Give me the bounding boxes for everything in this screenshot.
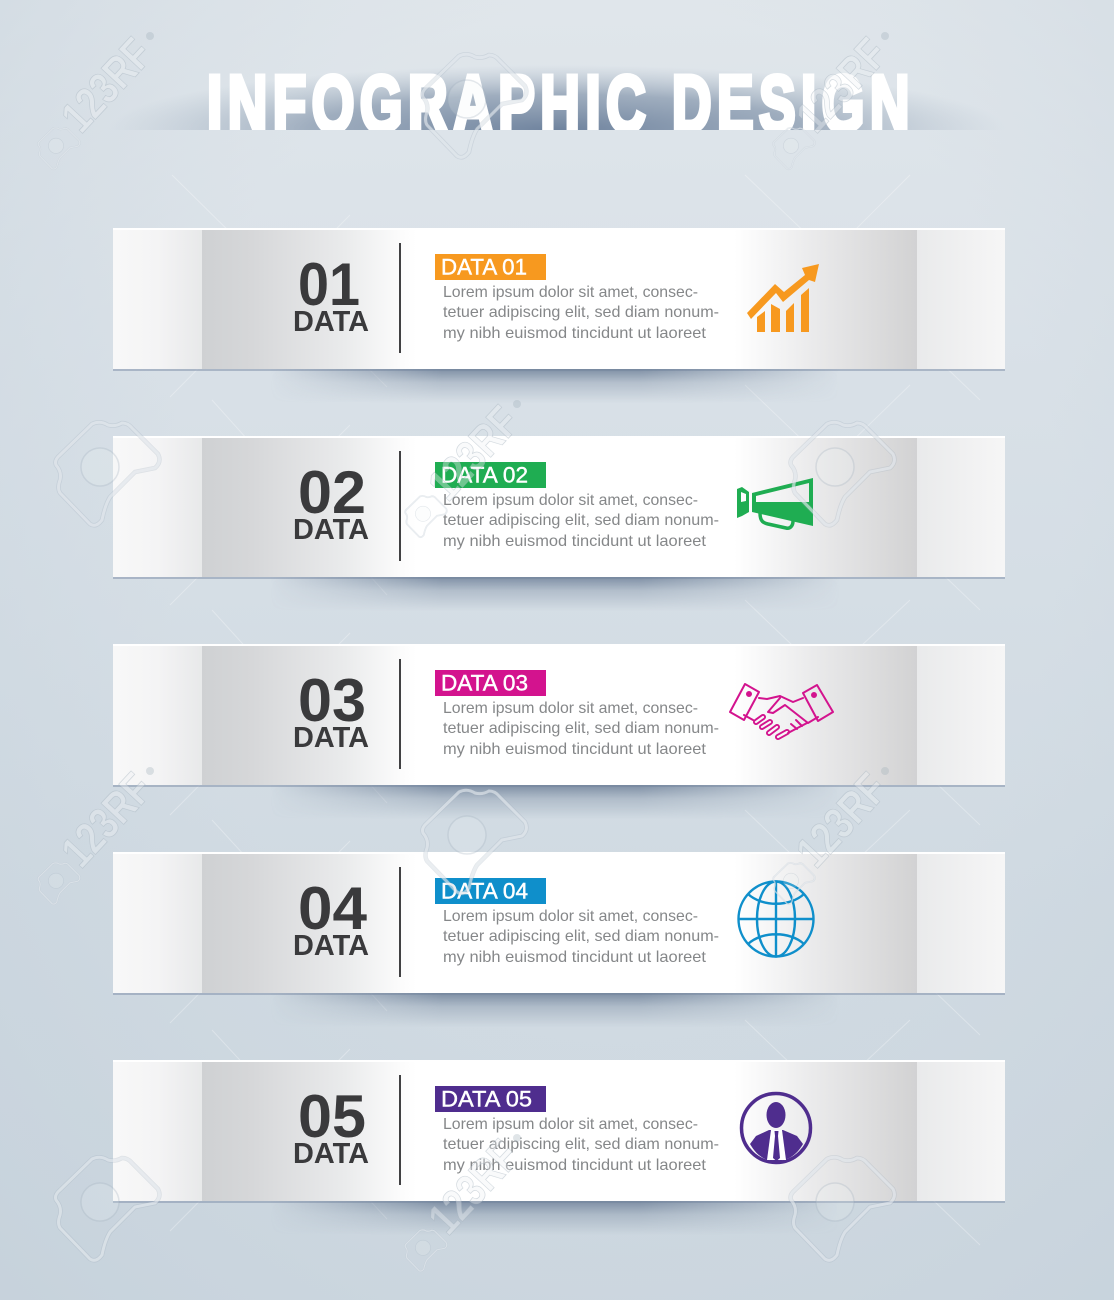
panel: row 3 — [113, 644, 1005, 819]
number 02: 02 — [298, 459, 366, 526]
panel: row 1 — [113, 228, 1005, 403]
number 01: 01 — [298, 251, 360, 318]
body text: tetuer adipiscing elit, sed diam nonum- — [443, 512, 719, 529]
title shadow — [148, 70, 968, 130]
watermarks: 123RF — [786, 28, 897, 142]
body text: Lorem ipsum dolor sit amet, consec- — [443, 908, 698, 925]
data caption: DATA — [293, 514, 369, 546]
body text: tetuer adipiscing elit, sed diam nonum- — [443, 304, 719, 321]
data caption: DATA — [293, 1138, 369, 1170]
body text: my nibh euismod tincidunt ut laoreet — [443, 741, 707, 758]
label: DATA 03: DATA 03 — [441, 670, 528, 696]
icon: megaphone — [737, 478, 813, 528]
body text: Lorem ipsum dolor sit amet, consec- — [443, 492, 698, 509]
body text — [443, 284, 719, 342]
watermarks: 123RF — [51, 28, 162, 142]
body text: tetuer adipiscing elit, sed diam nonum- — [443, 928, 719, 945]
watermarks: 123RF — [51, 763, 162, 877]
body text — [443, 492, 719, 550]
body text: Lorem ipsum dolor sit amet, consec- — [443, 700, 698, 717]
body text — [443, 908, 719, 966]
body text: my nibh euismod tincidunt ut laoreet — [443, 325, 707, 342]
watermarks: 123RF — [418, 396, 529, 510]
watermarks — [38, 28, 897, 1271]
panel: row 5 — [113, 1060, 1005, 1235]
body text: Lorem ipsum dolor sit amet, consec- — [443, 1116, 698, 1133]
number 05: 05 — [298, 1083, 366, 1150]
body text — [443, 700, 719, 758]
label: DATA 04: DATA 04 — [441, 878, 528, 904]
body text: my nibh euismod tincidunt ut laoreet — [443, 533, 707, 550]
watermarks: 123RF — [418, 1130, 529, 1244]
body text — [443, 1116, 719, 1174]
icon: globe — [738, 882, 814, 956]
icon: handshake — [730, 684, 833, 737]
icon: growth chart — [747, 264, 819, 332]
body text: my nibh euismod tincidunt ut laoreet — [443, 1157, 707, 1174]
data caption: DATA — [293, 306, 369, 338]
label: DATA 01: DATA 01 — [441, 254, 527, 280]
number 04: 04 — [298, 875, 368, 942]
body text: my nibh euismod tincidunt ut laoreet — [443, 949, 707, 966]
label: DATA 05: DATA 05 — [441, 1086, 532, 1112]
panel: row 2 — [113, 436, 1005, 611]
number 03: 03 — [298, 667, 366, 734]
body text: Lorem ipsum dolor sit amet, consec- — [443, 284, 698, 301]
panel: row 4 — [113, 852, 1005, 1027]
data caption: DATA — [293, 930, 369, 962]
watermarks: 123RF — [786, 763, 897, 877]
data caption: DATA — [293, 722, 369, 754]
body text: tetuer adipiscing elit, sed diam nonum- — [443, 1136, 719, 1153]
icon: businessman — [742, 1094, 810, 1162]
body text: tetuer adipiscing elit, sed diam nonum- — [443, 720, 719, 737]
label: DATA 02: DATA 02 — [441, 462, 528, 488]
